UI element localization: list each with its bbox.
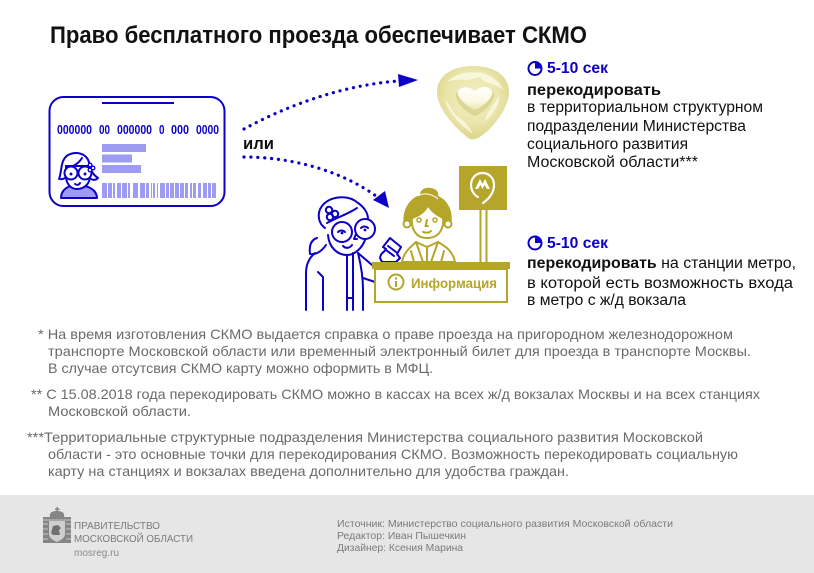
illustration: elderly woman with card (306, 197, 401, 310)
text block: recode at metro station: в которой есть возможность входа (527, 275, 793, 292)
illustration: information desk (372, 262, 510, 302)
card number (57, 123, 219, 137)
card number: 00 (99, 123, 110, 137)
text block: recode at metro station: перекодировать на станции метро, (527, 255, 796, 272)
time: 5-10 сек (547, 235, 609, 252)
text block: recode at ministry office (527, 60, 763, 171)
footnotes: карту на станциях и вокзалах введена дополнительно для удобства граждан. (48, 463, 569, 479)
footnotes (27, 326, 760, 479)
card number: 000000 (117, 123, 152, 137)
title: Право бесплатного проезда обеспечивает СКМО (50, 22, 587, 49)
card number: 000 (171, 123, 189, 137)
icon: gold heart-shaped gem (437, 66, 509, 139)
credits (337, 518, 673, 554)
icon: info (388, 274, 404, 290)
footnotes: ***Территориальные структурные подразделения Министерства социального развития Московской (27, 429, 703, 445)
illustration: information clerk (402, 188, 455, 262)
footnotes: В случае отсутсвия СКМО карту можно оформить в МФЦ. (48, 360, 433, 376)
icon: clock (528, 236, 542, 250)
desk label: Информация (411, 276, 497, 291)
icon: hand holding card (380, 238, 401, 262)
footer (0, 495, 814, 573)
card number: 0 (159, 123, 165, 137)
text block: recode at ministry office: в территориальном структурном (527, 99, 763, 116)
footnotes: области - это основные точки для перекодирования СКМО. Возможность перекодировать социальную (48, 446, 738, 462)
time: 5-10 сек (547, 60, 609, 77)
card barcode (102, 183, 216, 198)
arrow: card to activation terminal (244, 74, 418, 129)
government name: ПРАВИТЕЛЬСТВО (74, 520, 160, 532)
text block: recode at ministry office: подразделении Министерства (527, 118, 746, 135)
credits: Дизайнер: Ксения Марина (337, 542, 463, 554)
text block: recode at ministry office: перекодировать (527, 82, 661, 99)
footnotes: транспорте Московской области или временный электронный билет для проезда в транспорте Москвы. (48, 343, 751, 359)
card text bars (102, 144, 146, 173)
footer: mosreg.ru (74, 547, 119, 559)
footer: МОСКОВСКОЙ ОБЛАСТИ (74, 532, 193, 545)
credits: Источник: Министерство социального развития Московской области (337, 518, 673, 530)
icon: Moscow region coat of arms (43, 507, 71, 543)
card number: 000000 (57, 123, 92, 137)
card number: 0000 (196, 123, 219, 137)
text block: recode at metro station (527, 235, 796, 309)
footnotes: ** С 15.08.2018 года перекодировать СКМО можно в кассах на всех ж/д вокзалах Москвы и на всех станциях (31, 386, 760, 402)
arrow: card to metro information desk (244, 157, 389, 208)
footnotes: Московской области. (48, 403, 191, 419)
footnotes: * На время изготовления СКМО выдается справка о праве проезда на пригородном железнодорожном (38, 326, 733, 342)
card portrait (59, 153, 98, 198)
credits: Редактор: Иван Пышечкин (337, 530, 466, 542)
illustration: metro sign (459, 166, 507, 262)
icon: clock (528, 62, 542, 75)
text block: recode at ministry office: Московской области*** (527, 154, 698, 171)
text block: recode at metro station: в метро с ж/д вокзала (527, 292, 686, 309)
text block: recode at ministry office: социального развития (527, 136, 688, 153)
label: or: или (243, 134, 274, 153)
panel: social card (50, 97, 224, 206)
